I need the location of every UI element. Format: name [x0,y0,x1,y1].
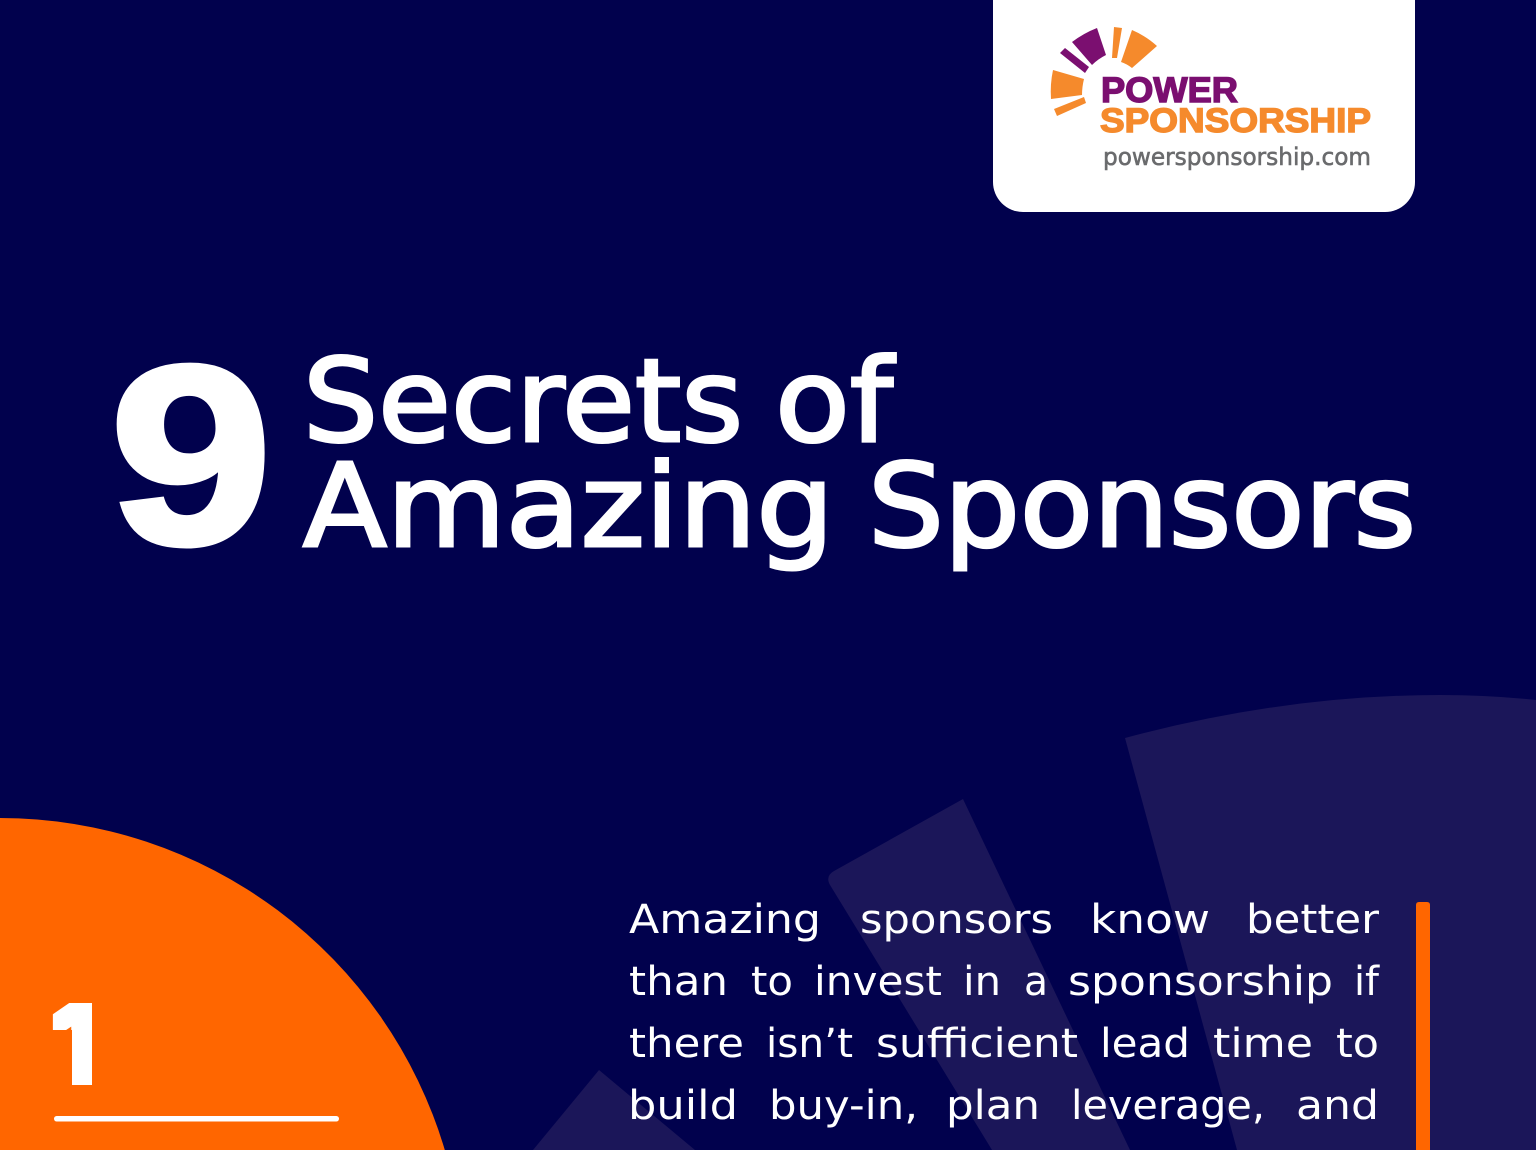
line 2 [629,959,1380,1005]
line 2: to [751,959,793,1005]
line 4: build [628,1083,738,1129]
line 1 [629,897,1380,943]
line 3: there [629,1021,744,1067]
line 4: leverage, [1071,1083,1265,1129]
line 2: if [1354,959,1380,1005]
line 4: plan [946,1083,1040,1129]
line 2: a [1024,959,1048,1005]
title [110,313,1416,597]
orange accent bar [1416,902,1430,1150]
line 2: in [963,959,1001,1005]
big numeral 9: 9 [110,313,272,597]
icon: power sunburst [1051,27,1157,116]
line 1: sponsors [860,897,1053,943]
section number 1: 1 [50,979,112,1111]
line 4: buy-in, [769,1083,918,1129]
line 1: Amazing [629,897,821,943]
heading line 1: of [775,335,896,469]
line 3 [629,1021,1379,1067]
underline [54,1116,339,1122]
logo wordmark: sponsorship: SPONSORSHIP [1100,102,1371,140]
decorative sunburst rays [533,695,1536,1150]
heading line 1: Secrets [303,335,743,469]
line 3: isn’t [766,1021,853,1067]
heading line 2: Amazing [303,440,834,574]
line 3: sufficient [876,1021,1078,1067]
line 2: sponsorship [1068,959,1333,1005]
logo card [993,0,1415,212]
line 2: invest [814,959,942,1005]
section 1 orange quarter circle [0,818,445,1150]
line 3: time [1213,1021,1313,1067]
line 2: than [629,959,728,1005]
line 4 [628,1083,1379,1129]
heading line 2 [303,440,1416,574]
logo url: powersponsorship.com [1103,143,1371,171]
line 3: to [1336,1021,1379,1067]
logo wordmark: power: POWER [1101,71,1238,110]
line 4: and [1296,1083,1379,1129]
line 1: know [1090,897,1210,943]
line 1: better [1246,897,1380,943]
heading line 2: Sponsors [868,440,1416,574]
body text [628,897,1380,1129]
line 3: lead [1100,1021,1190,1067]
